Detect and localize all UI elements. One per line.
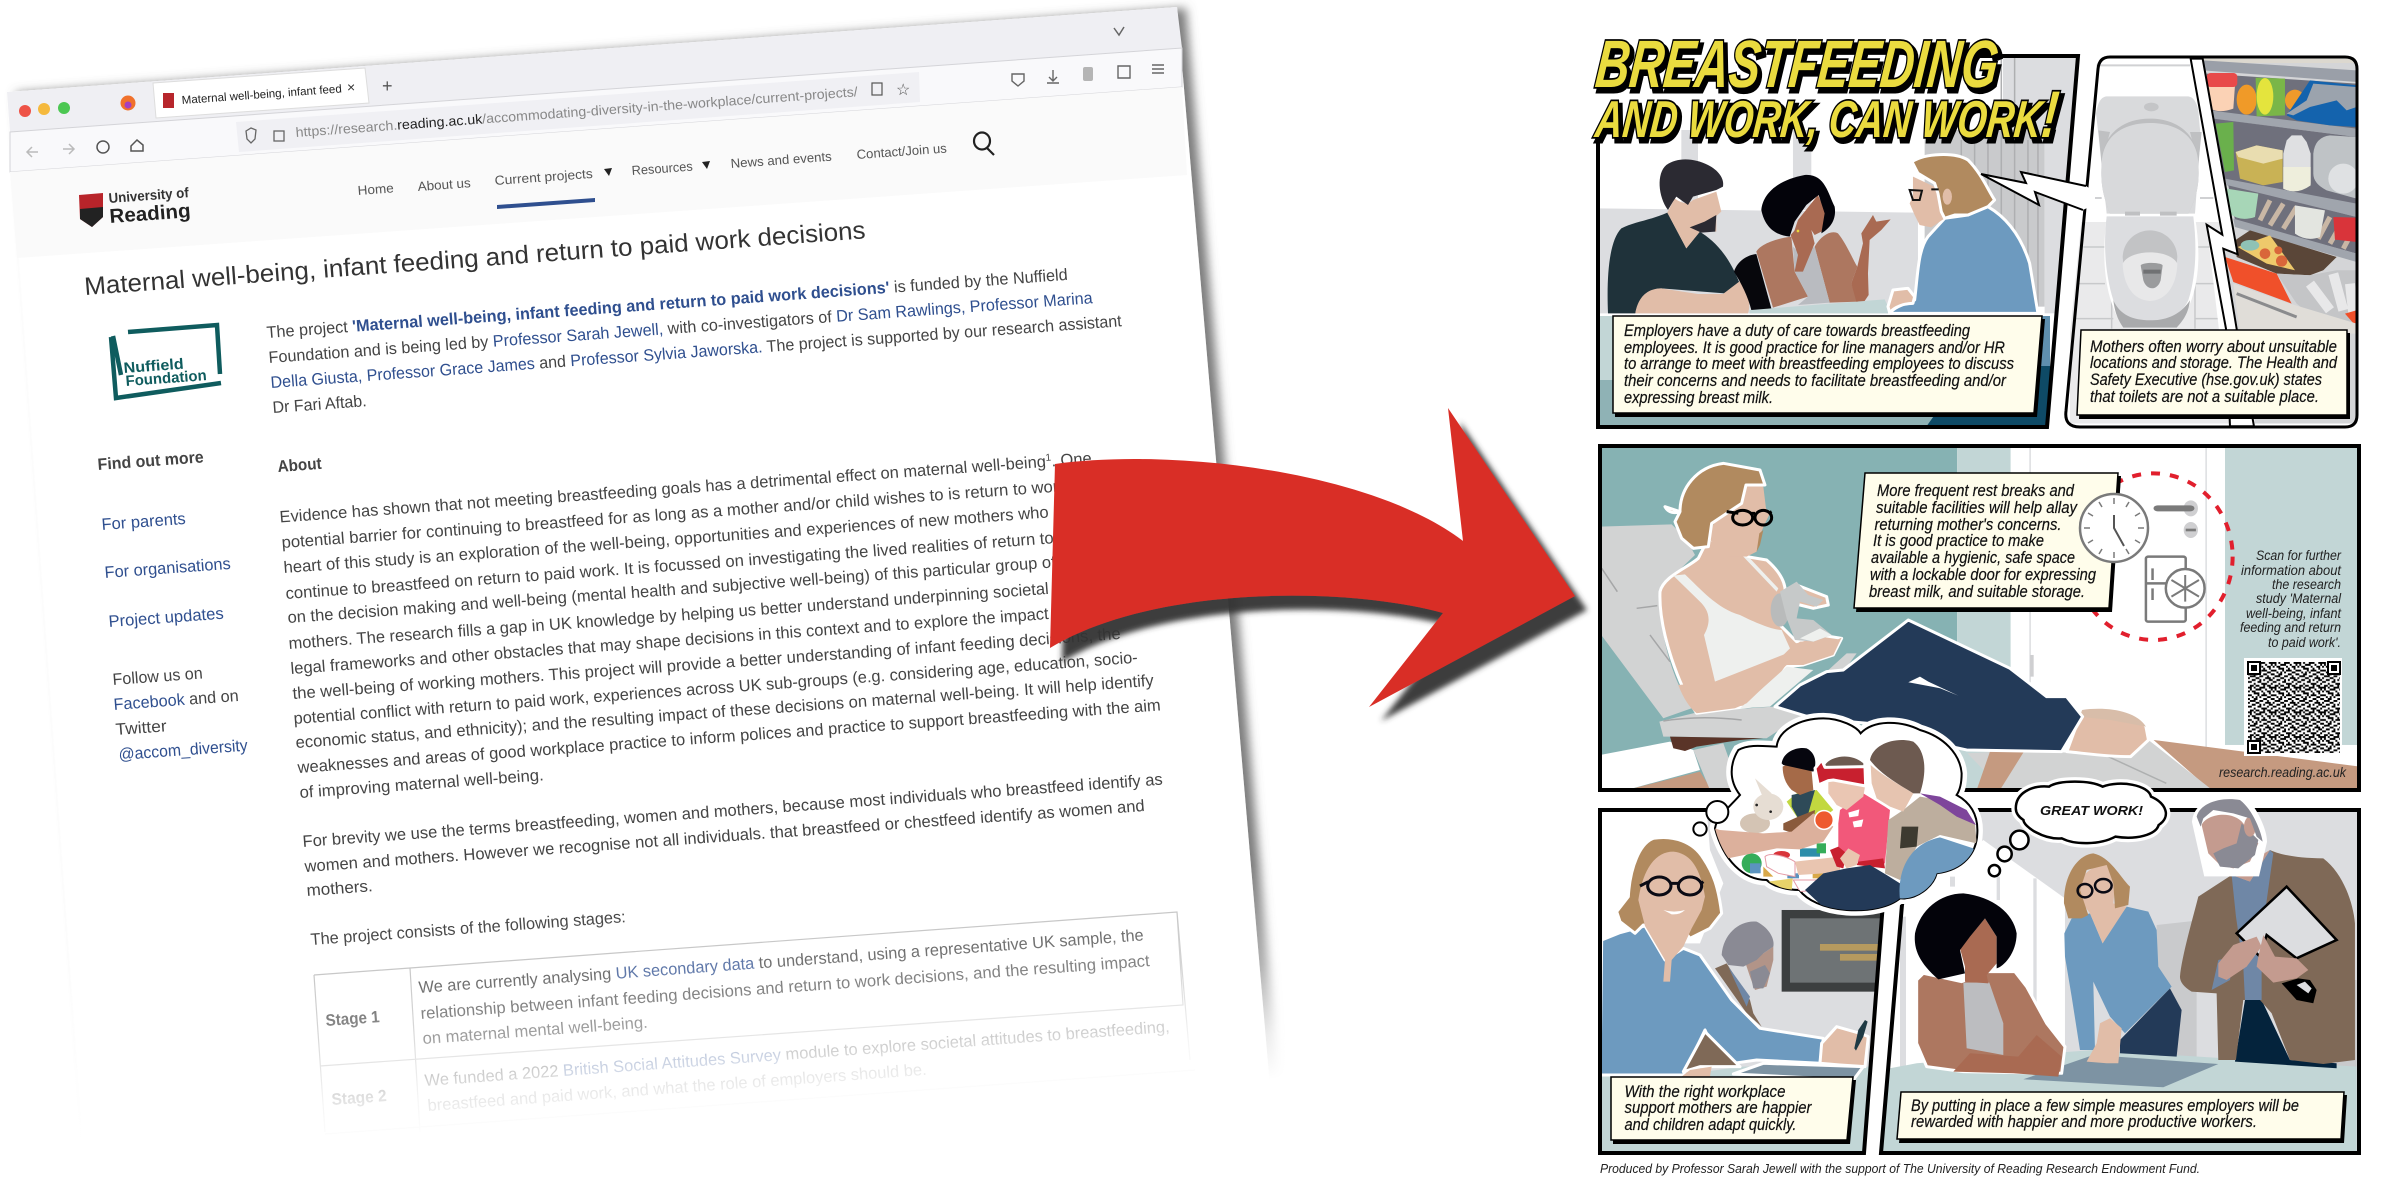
stages table: Stage 2 [331,1086,387,1109]
page heading: Maternal well-being, infant feeding and return to paid work decisions [83,216,866,301]
university of reading logo: University of [108,184,190,206]
about body text: potential conflict with return to paid work, experiences across UK sub-groups (e.g. considering age, education, socio- [293,648,1138,728]
open fridge illustration [2202,57,2358,425]
room background [1600,445,2360,792]
caption: duty of care: to arrange to meet with breastfeeding employees to discuss [1624,355,2014,373]
armchair and floor [1600,524,2025,790]
breastfeeding mother [1660,463,2083,752]
about body text: weaknesses and areas of good workplace practice to inform polices and practice to support breastfeeding with the aim [296,695,1161,777]
icon: firefox [120,96,136,110]
sidebar: find out more: Find out more [97,447,204,474]
icon: fridge freezer [2146,557,2205,622]
intro paragraph: Foundation and is being led by Professor Sarah Jewell, with co-investigators of Dr Sam Rawlings, Professor Marina [268,288,1094,367]
website url: research.reading.ac.uk [2219,765,2347,780]
scan for further information note: study 'Maternal [2256,591,2342,606]
scan for further information note [2240,548,2342,650]
about body text: potential barrier for continuing to breastfeed for as long as a mother and/or child wishes to is return to work [281,476,1068,552]
caption: rest breaks and facilities [1854,473,2121,612]
site navigation menu: News and events [730,149,833,171]
panel 4 border [1600,810,1890,1153]
sidebar: find out more: Project updates [108,604,224,631]
about body text: mothers. The research fills a gap in UK knowledge by helping us better understand underpinning societal [288,579,1049,653]
tab chevron [1114,27,1124,35]
caption: rest breaks and facilities: breast milk, and suitable storage. [1869,583,2085,601]
url bar [236,72,920,152]
white wall area [1600,810,1723,943]
browser toolbar icons [1012,65,1164,86]
intro paragraph: Della Giusta, Professor Grace James and Professor Sylvia Jaworska. The project is supported by our research assistant [270,311,1123,392]
caption: rest breaks and facilities: More frequent rest breaks and [1877,482,2075,500]
new tab plus: + [382,76,393,96]
browser tab bar [7,7,1182,132]
scan for further information note: Scan for further [2256,548,2341,563]
wall screen [1782,910,1888,992]
scan for further information note: well-being, infant [2246,606,2342,621]
caption: unsuitable locations: that toilets are not a suitable place. [2090,388,2319,406]
browser toolbar [10,48,1182,172]
about body text: economic status, and ethnicity); and the resulting impact of these decisions on maternal well-being. It will help identify [295,671,1155,752]
speech bubble: great work [1989,782,2166,876]
footer credit: Produced by Professor Sarah Jewell with the support of The University of Reading Research Endowment Fund. [1600,1162,2200,1176]
caption: rest breaks and facilities: It is good practice to make [1873,532,2044,550]
caption: duty of care: their concerns and needs to facilitate breastfeeding and/or [1624,372,2007,390]
man with tablet body [2180,850,2355,1068]
title: BREASTFEEDING [1596,31,2005,106]
sidebar: find out more: Follow us on [112,664,203,689]
caption: right workplace support: and children adapt quickly. [1624,1116,1796,1134]
woman in blue leaning [2064,853,2182,1063]
site header band [10,87,1187,258]
caption: simple measures [1897,1092,2347,1143]
intro paragraph: Dr Fari Aftab. [272,391,367,417]
intro paragraph: The project 'Maternal well-being, infant feeding and return to paid work decisions' is funded by the Nuffield [266,265,1068,342]
lightning outline [1981,172,2086,210]
caption: duty of care [1613,316,2045,417]
university of reading logo [79,184,191,228]
speech lightning connecting panels [1981,172,2095,210]
arrow: from website to comic [1050,408,1575,707]
caption: rest breaks and facilities: returning mother's concerns. [1874,516,2062,534]
title: AND WORK, CAN WORK! [1591,78,2062,152]
about body text: mothers. [306,876,373,900]
man head above the frame [2195,798,2264,873]
stages table: We are currently analysing UK secondary data to understand, using a representative UK sample, the [418,925,1144,997]
about body text: The project consists of the following stages: [310,907,626,949]
active tab: × [347,79,355,95]
caption: duty of care: Employers have a duty of care towards breastfeeding [1624,322,1971,340]
sidebar: find out more: Facebook and on [113,686,239,714]
about body text: on the decision making and well-being (mental health and subjective well-being) of this particular group of [287,552,1057,627]
toilet illustration [2070,65,2237,424]
caption: rest breaks and facilities: with a lockable door for expressing [1870,566,2097,584]
panel: browser window screenshot [0,7,1500,1200]
jagged panel divider [2191,59,2254,426]
dashed red highlight circle [2074,473,2233,640]
caption: right workplace support: support mothers are happier [1624,1099,1813,1117]
site navigation menu: Contact/Join us [856,140,948,162]
comic: top right panel, toilet and fridge [2066,57,2358,427]
colleague in background [1715,922,1774,1027]
scan for further information note: the research [2272,577,2341,592]
title: BREASTFEEDING [1593,27,2002,102]
browser page sheet [7,7,1272,1175]
panel 1 lower background strips [1598,316,2050,427]
man in dark shirt [1608,159,1749,313]
site navigation menu: About us [417,175,472,194]
nuffield foundation logo [111,325,221,398]
about body text: For brevity we use the terms breastfeeding, women and mothers, because most individuals who breastfeed identify as [302,770,1163,851]
university of reading logo: Reading [109,200,191,228]
stages table: on maternal mental well-being. [422,1013,648,1048]
bottom fade to white [0,828,1500,1200]
stages table: Stage 1 [325,1007,380,1030]
active tab: Maternal well-being, infant feed [181,83,342,107]
about body text [279,449,1163,949]
icon: clock [2080,494,2148,562]
woman in blue top [1888,155,2038,313]
thought bubble with children [1693,718,1983,917]
comic: bottom left panel, happy mother [1600,810,1900,1153]
nuffield foundation logo: Nuffield [123,356,184,377]
active tab [153,68,369,118]
sidebar: find out more: Twitter [115,716,168,739]
qr code [2244,658,2342,756]
url bar: https://research. reading.ac.uk/accommodating-diversity-in-the-workplace/current-projects/ [295,84,858,140]
nuffield foundation logo: Foundation [125,367,207,390]
great work text: GREAT WORK! [2040,803,2144,818]
panel 1 border [1598,56,2078,427]
caption: right workplace support: With the right workplace [1624,1083,1786,1101]
table [1600,1067,1877,1153]
icon: door handle and lock [2154,500,2198,538]
stages table: breastfeed and paid work, and what the role of employers should be. [427,1060,927,1115]
stages table: We funded a 2022 British Social Attitudes Survey module to explore societal attitudes to breastfeeding, [424,1017,1170,1090]
comic: middle panel, expressing milk [1600,445,2360,792]
paper on table [1733,1063,1863,1080]
title [1591,27,2065,156]
caption: duty of care: expressing breast milk. [1624,389,1773,407]
caption: duty of care: employees. It is good practice for line managers and/or HR [1624,339,2005,357]
site navigation menu [357,140,948,209]
about body text: Evidence has shown that not meeting breastfeeding goals has a detrimental effect on maternal well-being [279,452,1049,526]
scan for further information note: to paid work'. [2268,635,2341,650]
scan for further information note: feeding and return [2240,620,2341,635]
about body text: women and mothers. However we recognise not all individuals. that breastfeed or chestfeed identify as women and [303,796,1145,876]
site navigation menu: Current projects [494,166,594,188]
scan for further information note: information about [2241,563,2342,578]
caption: unsuitable locations: Mothers often worry about unsuitable [2090,338,2337,356]
comic: top left panel, meeting [1598,56,2078,427]
icon: search [974,132,994,155]
caption: unsuitable locations: locations and storage. The Health and [2090,354,2338,372]
comic: bottom right panel, happy team [1880,798,2360,1153]
caption: simple measures: rewarded with happier and more productive workers. [1911,1113,2257,1131]
about body text: heart of this study is an exploration of the well-being, opportunities and experiences of new mothers who [283,503,1049,577]
meeting room background [1598,56,2078,313]
paper on table [2023,1055,2218,1087]
caption: simple measures: By putting in place a few simple measures employers will be [1911,1097,2299,1115]
sidebar: find out more [97,447,249,764]
stages table: relationship between infant feeding decisions and return to work decisions, and the resulting impact [420,951,1151,1023]
about heading: About [277,454,323,476]
about body text: . One [1051,449,1092,470]
site navigation menu: Home [357,180,394,198]
caption: rest breaks and facilities: available a hygienic, safe space [1871,549,2075,567]
navigation icons [27,140,143,157]
smiling mother [1600,837,1868,1077]
url bar: ☆ [896,82,910,99]
about body text: 1 [1045,452,1052,464]
site navigation menu: Resources [631,159,694,178]
table [1880,1050,2357,1153]
seated woman with dark hair [1915,893,2065,1077]
woman in brown jacket [1734,175,1891,310]
caption: unsuitable locations: Safety Executive (hse.gov.uk) states [2090,371,2322,389]
caption: right workplace support [1611,1077,1856,1144]
caption: rest breaks and facilities: suitable facilities will help allay [1876,499,2079,517]
children playing [1715,740,1983,917]
about body text: the well-being of working mothers. This project will provide a better understanding of infant feeding decisions, the [292,624,1121,703]
traffic lights [19,102,70,117]
sidebar: find out more: For organisations [104,554,231,582]
panel 2 frame [2066,57,2357,427]
stages table [314,912,1195,1134]
office background [1890,840,2357,1070]
about body text: continue to breastfeed on return to paid work. It is focussed on investigating the lived realities of return to [285,528,1054,603]
title: AND WORK, CAN WORK! [1594,82,2065,156]
caption: unsuitable locations [2077,330,2350,419]
intro paragraph [266,265,1123,417]
raised foot [2067,709,2148,757]
sidebar: find out more: @accom_diversity [118,736,249,764]
about body text: legal frameworks and other obstacles that may shape decisions in this context and to explore the impact [290,604,1050,678]
panel 5 border [1881,810,2359,1153]
about body text: of improving maternal well-being. [299,765,544,802]
panel 3 border [1600,446,2359,790]
sidebar: find out more: For parents [101,509,186,534]
